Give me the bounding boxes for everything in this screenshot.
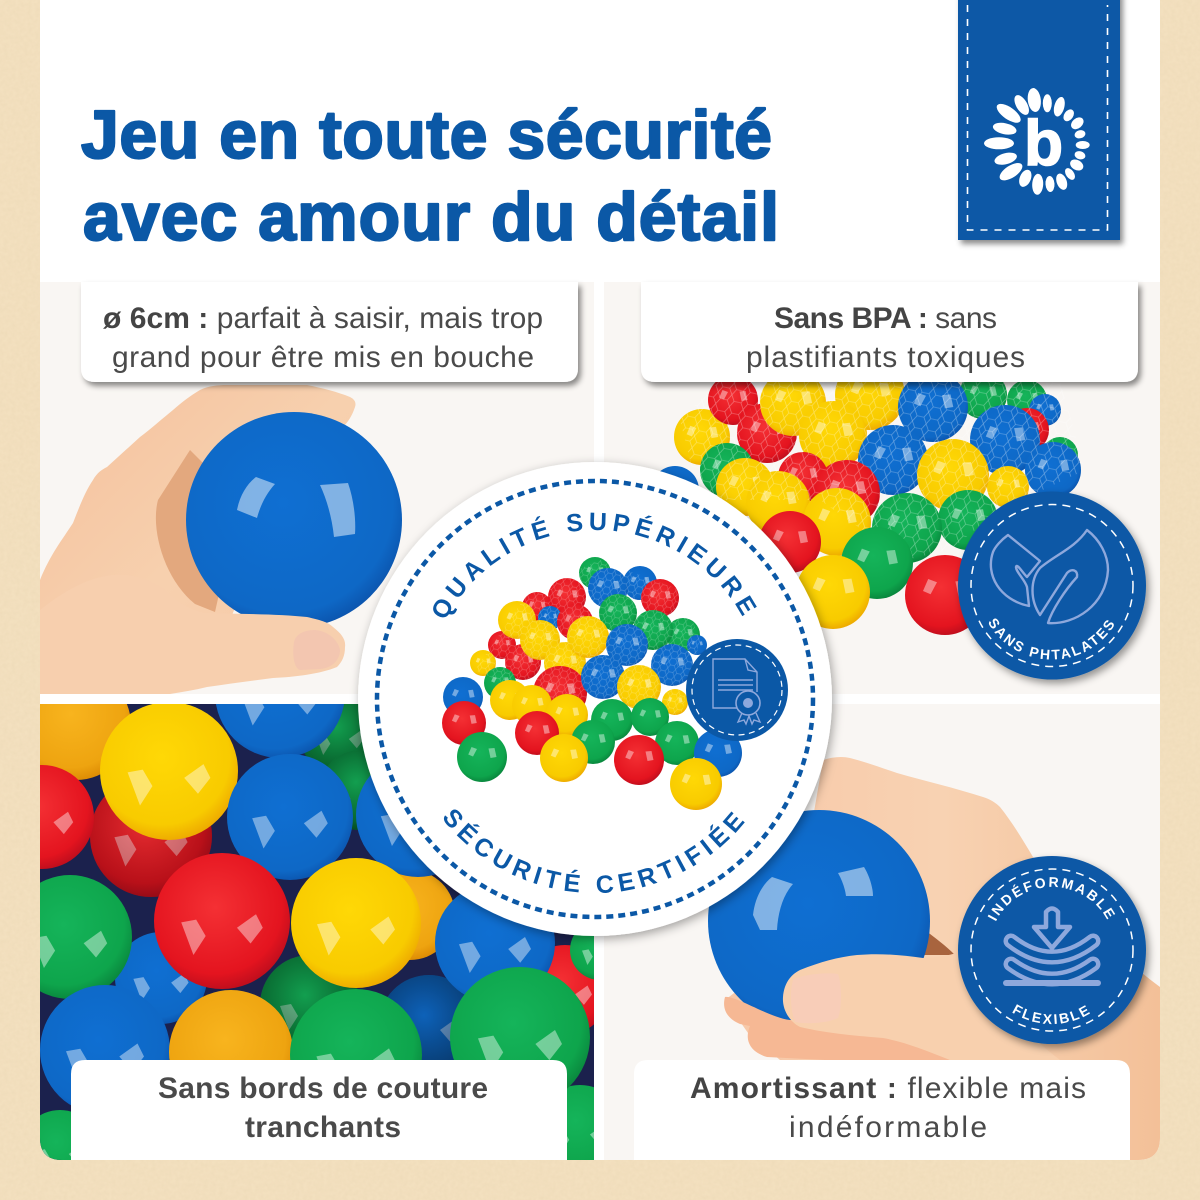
thumbnail: [791, 973, 841, 1023]
badge: certificate: [686, 639, 788, 741]
icon: hand behind ball: [725, 757, 1160, 1160]
title: Jeu en toute sécurité: [81, 97, 772, 173]
finger fold shadow: [924, 933, 954, 955]
badge: indéformable flexible: FLEXIBLE: [1012, 1004, 1090, 1024]
icon: thumb: [783, 952, 1060, 1060]
caption: seams: tranchants: [245, 1111, 401, 1144]
central quality seal: SÉCURITÉ CERTIFIÉE: [444, 810, 745, 893]
panel: hand squeezing ball: [604, 704, 1160, 1160]
caption: cushioning: indéformable: [789, 1111, 987, 1144]
panel: close-up ball pit: [40, 704, 594, 1160]
caption: diameter: [81, 282, 578, 382]
central quality seal: [354, 458, 840, 946]
badge: sans phtalates: SANS PHTALATES: [988, 618, 1114, 660]
badge: indéformable flexible: INDÉFORMABLE: [988, 877, 1116, 921]
badge: sans phtalates: [956, 491, 1154, 688]
brand tag with logo: [958, 0, 1120, 240]
title: [81, 97, 779, 255]
caption: BPA: [641, 282, 1138, 382]
caption: diameter: ø 6cm : parfait à saisir, mais trop: [103, 302, 543, 335]
logo: sun with letter b: b: [1024, 107, 1063, 179]
caption: BPA: Sans BPA : sans: [774, 302, 997, 335]
icon: lower fingers: [724, 997, 950, 1060]
caption: seams: Sans bords de couture: [158, 1072, 488, 1105]
icon: two leaves: [991, 530, 1108, 623]
title: avec amour du détail: [83, 179, 779, 255]
badge: indéformable flexible: [956, 855, 1154, 1053]
caption: seams: [71, 1060, 567, 1160]
thumbnail: [293, 630, 340, 670]
net overlay: [680, 380, 1085, 560]
icon: hand with fingers behind ball: [40, 385, 356, 614]
caption: cushioning: Amortissant : flexible mais: [690, 1072, 1086, 1105]
balls under net: [674, 382, 1081, 562]
caption: cushioning: [634, 1060, 1130, 1160]
blue ball: [708, 810, 930, 1032]
panel: hand holding blue ball: [40, 282, 594, 694]
panel: netted balls: [604, 282, 1160, 694]
netted ball pile: [442, 557, 742, 810]
icon: thumb: [170, 614, 346, 694]
blue ball: [186, 412, 402, 628]
inner palm shadow: [156, 450, 218, 612]
caption: BPA: plastifiants toxiques: [746, 341, 1025, 374]
loose balls: [651, 466, 985, 635]
logo: sun with letter b: [984, 87, 1090, 195]
central quality seal: QUALITÉ SUPÉRIEURE: [433, 512, 757, 618]
caption: diameter: grand pour être mis en bouche: [112, 341, 534, 374]
icon: compression layers: [1006, 908, 1098, 983]
